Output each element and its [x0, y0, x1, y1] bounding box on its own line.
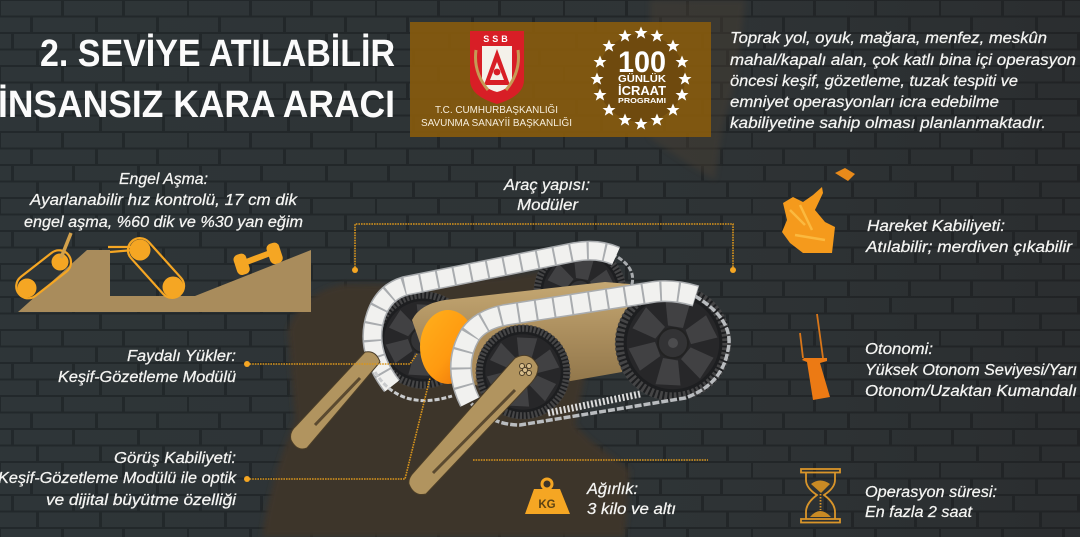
- obstacle climbing diagram: [11, 233, 311, 312]
- front track: [461, 286, 730, 425]
- brown shadow blob top right: [650, 0, 745, 180]
- text: Hareket Kabiliyeti: Atılabilir; merdiven çıkabilir: [865, 239, 1073, 256]
- text: Operasyon süresi: En fazla 2 saat: [865, 504, 973, 521]
- icon: hourglass: [801, 469, 840, 522]
- logo caption: T.C. CUMHURBAŞKANLIĞI: [435, 103, 558, 116]
- text: Görüş Kabiliyeti: [0, 450, 237, 509]
- text: Görüş Kabiliyeti: ve dijital büyütme özelliği: [46, 492, 237, 509]
- text: Faydalı Yükler: Faydalı Yükler:: [127, 348, 236, 365]
- chassis body: [412, 282, 630, 392]
- intro paragraph: kabiliyetine sahip olması planlanmaktadır.: [730, 115, 1046, 132]
- icon: KG weight: KG: [538, 499, 556, 511]
- text: Operasyon süresi: [865, 484, 997, 521]
- icon: track on slope: [232, 241, 284, 276]
- text: Ağırlık: Ağırlık:: [586, 481, 638, 498]
- logo caption: [421, 103, 572, 129]
- icon: 100 days program badge: PROGRAMI: [618, 96, 666, 105]
- text: Araç yapısı: [503, 177, 590, 214]
- bracket: vehicle structure: [352, 224, 736, 273]
- icon: autonomy antenna module: [800, 314, 830, 400]
- icon: track on step: [11, 233, 76, 303]
- title: [0, 33, 395, 126]
- divider line: [473, 459, 708, 461]
- logo banner: [410, 22, 711, 137]
- front leg: [409, 355, 538, 495]
- icon: track on wall: [108, 233, 189, 303]
- payload dome: [420, 310, 490, 392]
- icon: 100 days program badge: GÜNLÜK: [618, 72, 666, 85]
- text: Hareket Kabiliyeti: Hareket Kabiliyeti:: [867, 218, 1005, 235]
- text: Araç yapısı: Modüler: [517, 197, 579, 214]
- icon: KG weight: [525, 479, 570, 514]
- text: Görüş Kabiliyeti: Keşif-Gözetleme Modülü ile optik: [0, 470, 237, 487]
- icon: SSB shield: SSB: [483, 34, 511, 44]
- icon: climbing figure: [782, 168, 855, 253]
- text: Operasyon süresi: Operasyon süresi:: [865, 484, 997, 501]
- rear track: [372, 246, 633, 401]
- text: Faydalı Yükler: Keşif-Gözetleme Modülü: [58, 369, 236, 386]
- intro paragraph: Toprak yol, oyuk, mağara, menfez, meskûn: [730, 30, 1047, 47]
- intro paragraph: öncesi keşif, gözetleme, tuzak tespiti ve: [730, 73, 1018, 90]
- text: Ağırlık: 3 kilo ve altı: [587, 501, 676, 518]
- text: Ağırlık: [586, 481, 676, 518]
- intro paragraph: mahal/kapalı alan, çok katlı bina içi operasyon: [730, 52, 1076, 69]
- text: Görüş Kabiliyeti: Görüş Kabiliyeti:: [114, 450, 236, 467]
- icon: 100 days program badge: [590, 26, 692, 130]
- logo caption: SAVUNMA SANAYİİ BAŞKANLIĞI: [421, 116, 572, 129]
- text: Engel Aşma: [24, 171, 303, 231]
- title: İNSANSIZ KARA ARACI: [0, 84, 395, 126]
- leader: payload: [244, 354, 417, 367]
- text: Otonomi: Otonomi:: [865, 341, 933, 358]
- text: Engel Aşma: Ayarlanabilir hız kontrolü, 17 cm dik: [29, 192, 298, 209]
- icon: 100 days program badge: 100: [618, 46, 666, 79]
- vehicle: [291, 246, 730, 495]
- leader: vision: [244, 378, 430, 482]
- brown shadow blob behind vehicle: [262, 270, 630, 537]
- text: Hareket Kabiliyeti: [865, 218, 1073, 256]
- title: 2. SEVİYE ATILABİLİR: [40, 33, 395, 75]
- text: Otonomi: [865, 341, 1077, 400]
- text: Araç yapısı: Araç yapısı:: [503, 177, 590, 194]
- icon: SSB shield: [470, 31, 524, 104]
- text: Faydalı Yükler: [58, 348, 236, 386]
- icon: 100 days program badge: İCRAAT: [618, 83, 666, 98]
- rear leg: [291, 352, 380, 449]
- text: Engel Aşma: Engel Aşma:: [119, 171, 208, 188]
- text: Engel Aşma: engel aşma, %60 dik ve %30 yan eğim: [24, 214, 303, 231]
- intro paragraph: emniyet operasyonları icra edebilme: [730, 94, 999, 111]
- text: Otonomi: Yüksek Otonom Seviyesi/Yarı: [865, 362, 1077, 379]
- intro paragraph: [730, 30, 1076, 132]
- text: Otonomi: Otonom/Uzaktan Kumandalı: [865, 383, 1077, 400]
